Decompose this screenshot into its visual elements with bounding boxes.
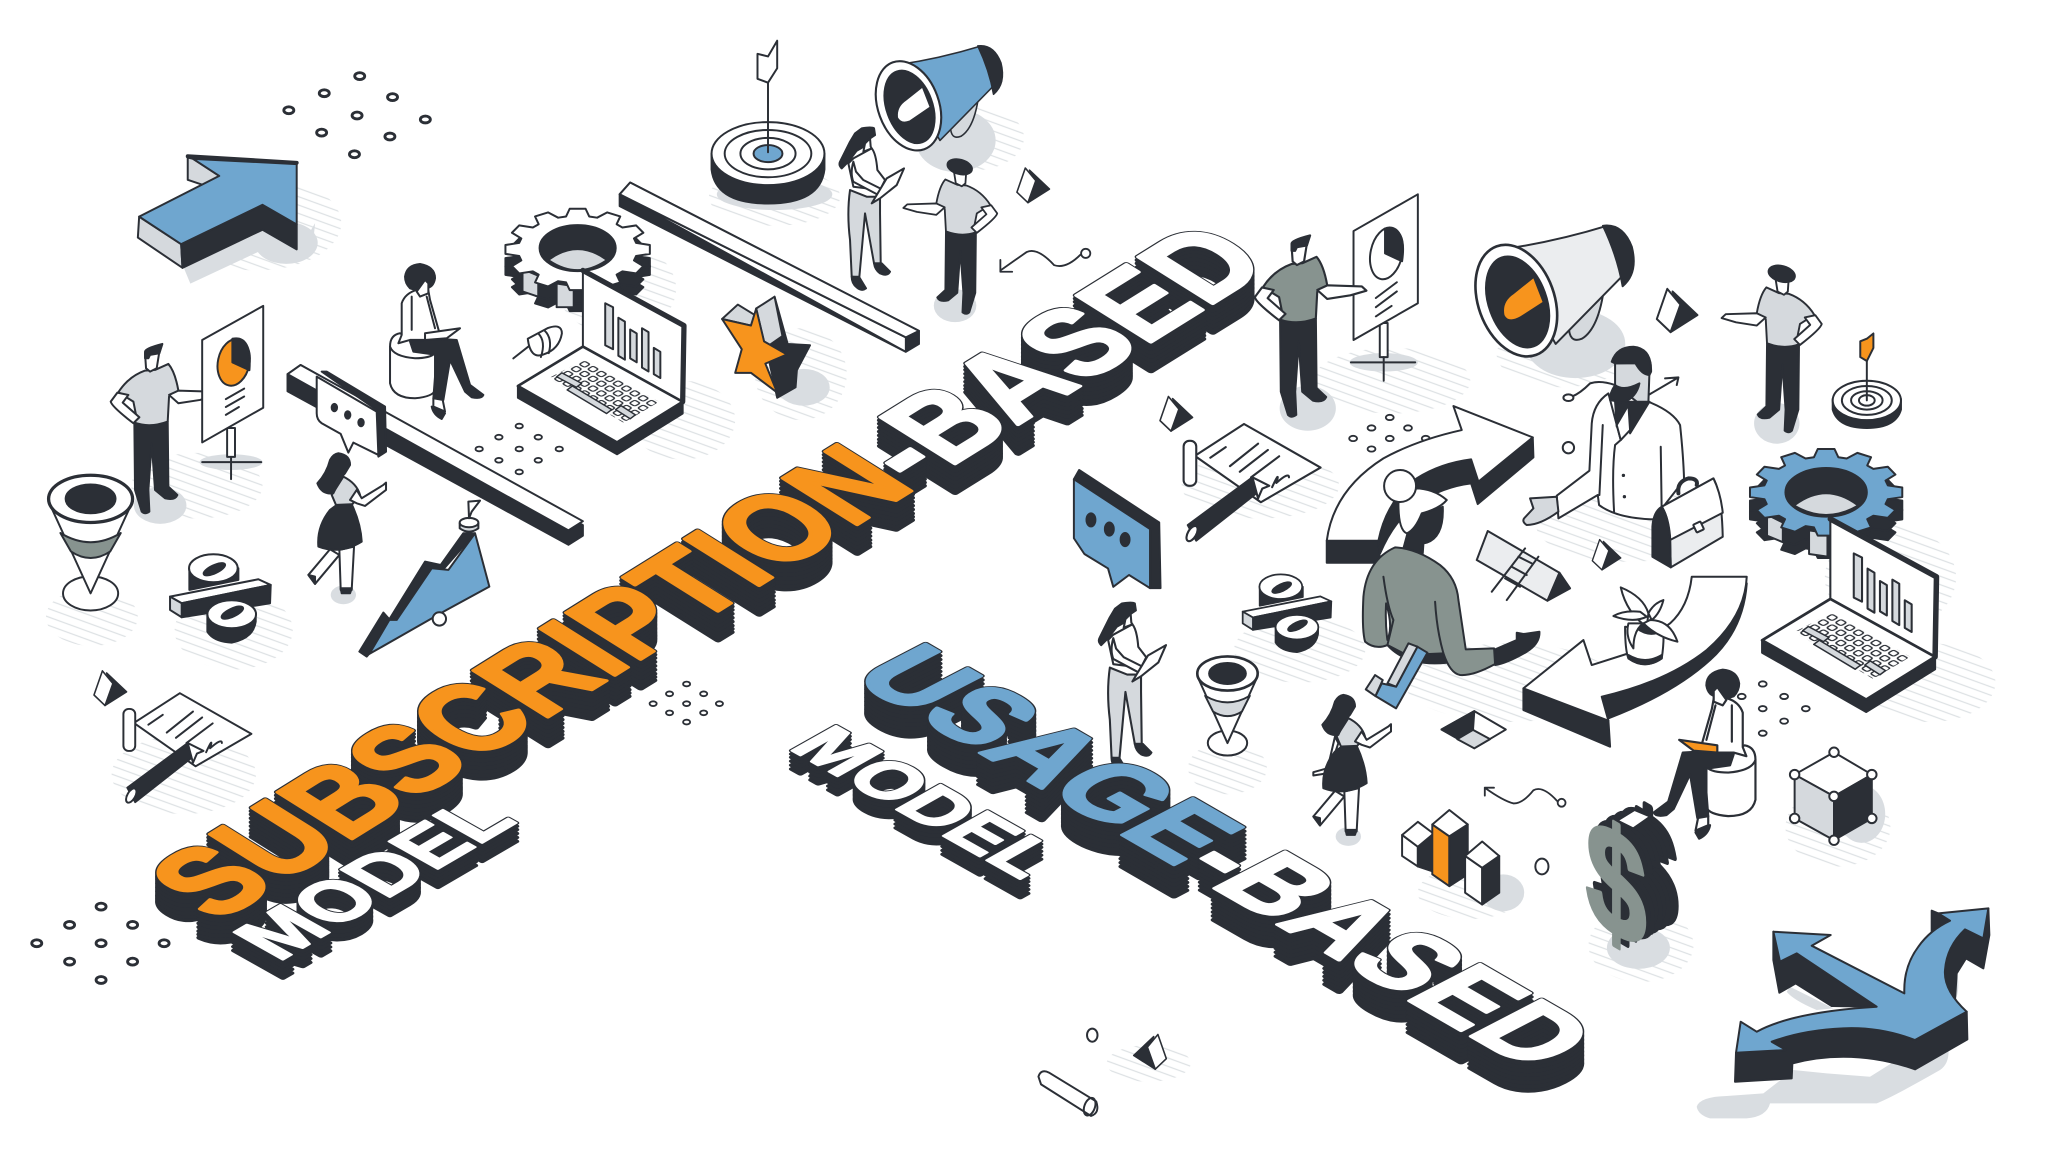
subtitle: MODEL right: MODEL <box>774 726 1080 899</box>
title: USAGE-BASED: USAGE-BASED <box>827 649 1624 1102</box>
title: USAGE-BASED: USAGE-BASED <box>827 630 1624 1083</box>
person: man gesturing, top <box>903 157 997 322</box>
chart board: pie on easel, left <box>200 306 263 479</box>
dollar sign icon: $ <box>1594 778 1654 982</box>
dollar sign icon: $ <box>1610 769 1670 972</box>
icon: laptop with bar chart, right <box>1762 519 1936 712</box>
dollar sign icon: $ <box>1586 782 1646 986</box>
beam: lower bar <box>288 365 583 545</box>
person: woman in dress, center right <box>1313 695 1391 846</box>
title: SUBSCRIPTION-BASED: SUBSCRIPTION-BASED <box>119 215 1296 948</box>
subtitle: MODEL right: MODEL <box>774 716 1080 888</box>
person: seated woman with laptop, left <box>390 264 483 419</box>
title: SUBSCRIPTION-BASED: SUBSCRIPTION-BASED <box>119 227 1296 960</box>
person: presenter man, left <box>111 344 215 524</box>
person: bearded man in coat <box>1523 347 1684 525</box>
icon: push pin <box>513 326 562 358</box>
title: USAGE-BASED: USAGE-BASED <box>827 633 1624 1087</box>
icon: orange star <box>722 297 830 406</box>
icon: target with flag, top <box>712 41 824 203</box>
icon: ruler and prism <box>1477 531 1570 601</box>
person: man gesturing, right <box>1722 263 1822 444</box>
icon: blue arrow pointing up-right <box>138 156 315 284</box>
icon: curved white arrow, upper <box>1327 406 1533 563</box>
title: SUBSCRIPTION-BASED: SUBSCRIPTION-BASED <box>119 211 1296 944</box>
person: seated woman with orange laptop, right <box>1654 670 1755 839</box>
person: woman with tablet, center <box>1099 603 1166 771</box>
icon: percent sign, right <box>1243 574 1331 652</box>
small circles <box>1087 859 1548 1042</box>
person: woman in dress, left <box>308 453 386 604</box>
subtitle: MODEL left: MODEL <box>215 792 534 978</box>
title: SUBSCRIPTION-BASED: SUBSCRIPTION-BASED <box>119 205 1296 937</box>
speech bubble: white with dots <box>317 372 386 457</box>
title: USAGE-BASED: USAGE-BASED <box>827 657 1624 1110</box>
title: SUBSCRIPTION-BASED: SUBSCRIPTION-BASED <box>119 205 1296 937</box>
decorative dot cluster: behind curved arrow <box>1349 415 1430 452</box>
decorative dot cluster: near laptop <box>476 424 563 474</box>
icon: funnel, center <box>1197 656 1258 756</box>
subtitle: MODEL left: MODEL <box>215 800 534 986</box>
subtitle: MODEL right: MODEL <box>774 719 1080 891</box>
title: SUBSCRIPTION-BASED: SUBSCRIPTION-BASED <box>119 219 1296 952</box>
icon: triangle prism, bottom center <box>1134 1035 1166 1069</box>
icon: gear, top left <box>505 209 650 311</box>
title: USAGE-BASED: USAGE-BASED <box>827 661 1624 1114</box>
icon: document and pencil, left <box>123 693 251 804</box>
decorative dot cluster: bottom left <box>32 903 169 983</box>
icon: laptop with bar chart, left <box>518 270 684 454</box>
bar chart: three 3D columns <box>1402 810 1524 911</box>
decorative dot cluster: top <box>284 73 430 158</box>
icon: percent sign, left <box>170 554 271 643</box>
person: presenter man, right <box>1255 235 1366 431</box>
icon: funnel, left <box>49 475 133 610</box>
title: USAGE-BASED: USAGE-BASED <box>827 645 1624 1099</box>
icon: triangle prism, top center <box>1017 168 1049 203</box>
subtitle: MODEL right: MODEL <box>774 730 1080 902</box>
subtitle: MODEL left: MODEL <box>215 786 534 971</box>
icon: squiggle arrow, lower <box>1485 788 1566 807</box>
icon: diverging blue arrows <box>1697 908 1989 1118</box>
chart board: pie on easel, right <box>1350 194 1418 381</box>
icon: triangle prism, left <box>94 671 127 706</box>
speech bubble: blue with dots <box>1074 470 1161 588</box>
icon: curved white arrow, lower <box>1523 577 1747 747</box>
icon: triangle prism near document <box>1160 396 1193 431</box>
icon: triangle prism near ruler <box>1592 540 1621 570</box>
icon: squiggle arrow, top <box>1000 249 1090 272</box>
subtitle: MODEL left: MODEL <box>215 804 534 990</box>
dollar sign icon: $ <box>1617 765 1678 968</box>
icon: potted plant <box>1613 587 1677 664</box>
icon: square pit <box>1441 711 1506 748</box>
person: woman with tablet, top <box>839 128 904 290</box>
title: SUBSCRIPTION-BASED: SUBSCRIPTION-BASED <box>119 208 1296 941</box>
title: SUBSCRIPTION-BASED: SUBSCRIPTION-BASED <box>119 234 1296 966</box>
icon: large megaphone, right <box>1461 226 1634 378</box>
icon: document and pencil, right <box>1184 424 1321 543</box>
icon: triangle prism, upper right <box>1657 289 1697 332</box>
icon: blue megaphone, top <box>864 46 1002 172</box>
subtitle: MODEL left: MODEL <box>215 786 534 971</box>
dollar sign icon: $ <box>1602 773 1662 976</box>
beam: top bar <box>620 182 919 352</box>
title: SUBSCRIPTION-BASED: SUBSCRIPTION-BASED <box>119 230 1296 963</box>
title: USAGE-BASED: USAGE-BASED <box>827 653 1624 1106</box>
title: USAGE-BASED: USAGE-BASED <box>827 630 1624 1083</box>
icon: mountain chart with flag <box>359 501 489 657</box>
subtitle: MODEL right: MODEL <box>774 722 1080 895</box>
title: USAGE-BASED: USAGE-BASED <box>827 641 1624 1095</box>
subtitle: MODEL left: MODEL <box>215 789 534 974</box>
title: USAGE-BASED: USAGE-BASED <box>827 637 1624 1091</box>
decorative dot cluster: right <box>1738 681 1810 736</box>
icon: 3D cube with nodes <box>1790 748 1885 845</box>
title: SUBSCRIPTION-BASED: SUBSCRIPTION-BASED <box>119 223 1296 956</box>
icon: blue gear, right <box>1750 449 1902 558</box>
icon: briefcase <box>1652 478 1723 567</box>
subtitle: MODEL right: MODEL <box>774 716 1080 888</box>
person: large seated man from behind <box>1363 470 1539 708</box>
icon: small target with orange flag <box>1833 333 1901 428</box>
icon: roll cylinder, bottom center <box>1038 1071 1098 1117</box>
subtitle: MODEL right: MODEL <box>774 734 1080 906</box>
dollar sign icon <box>1586 765 1678 986</box>
decorative dot cluster: center <box>650 682 723 724</box>
subtitle: MODEL left: MODEL <box>215 796 534 982</box>
